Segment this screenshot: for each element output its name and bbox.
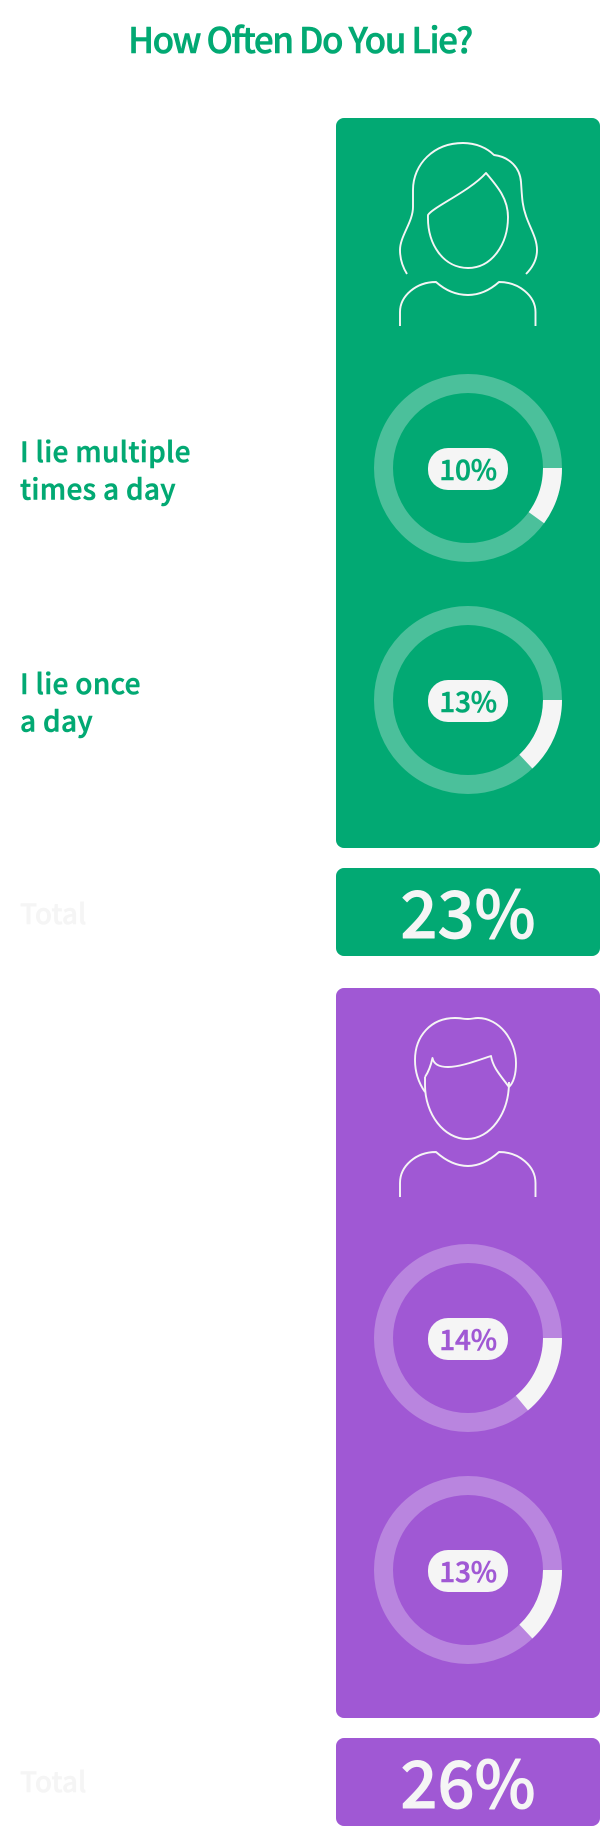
title: How Often Do You Lie? [128,13,472,64]
label: total women: Total [20,893,86,933]
label: I lie multiple times a day: times a day [20,468,176,508]
label: I lie once a day: a day [20,700,93,740]
donut: men multiple times a day 14% [384,1254,553,1422]
donut: men multiple times a day 14%: 14% [439,1319,497,1359]
icon: man [400,1018,536,1197]
donut: I lie once a day 13% [384,616,553,784]
donut: I lie multiple times a day 10% [384,384,553,552]
total box: women 23% [336,863,600,957]
total box: men 26% [336,1733,600,1826]
total box: women 23%: 23% [400,863,536,957]
donut: men once a day 13%: 13% [439,1551,497,1591]
total box: men 26%: 26% [400,1733,536,1826]
donut: men once a day 13% [384,1486,553,1654]
label: I lie once a day: I lie once [20,663,141,703]
donut: I lie multiple times a day 10%: 10% [439,449,497,489]
label: I lie multiple times a day: I lie multiple [20,431,191,471]
icon: woman [400,143,537,326]
panel: men [336,988,600,1718]
panel: women [336,118,600,848]
donut: I lie once a day 13%: 13% [439,681,497,721]
label: total men: Total [20,1761,86,1801]
